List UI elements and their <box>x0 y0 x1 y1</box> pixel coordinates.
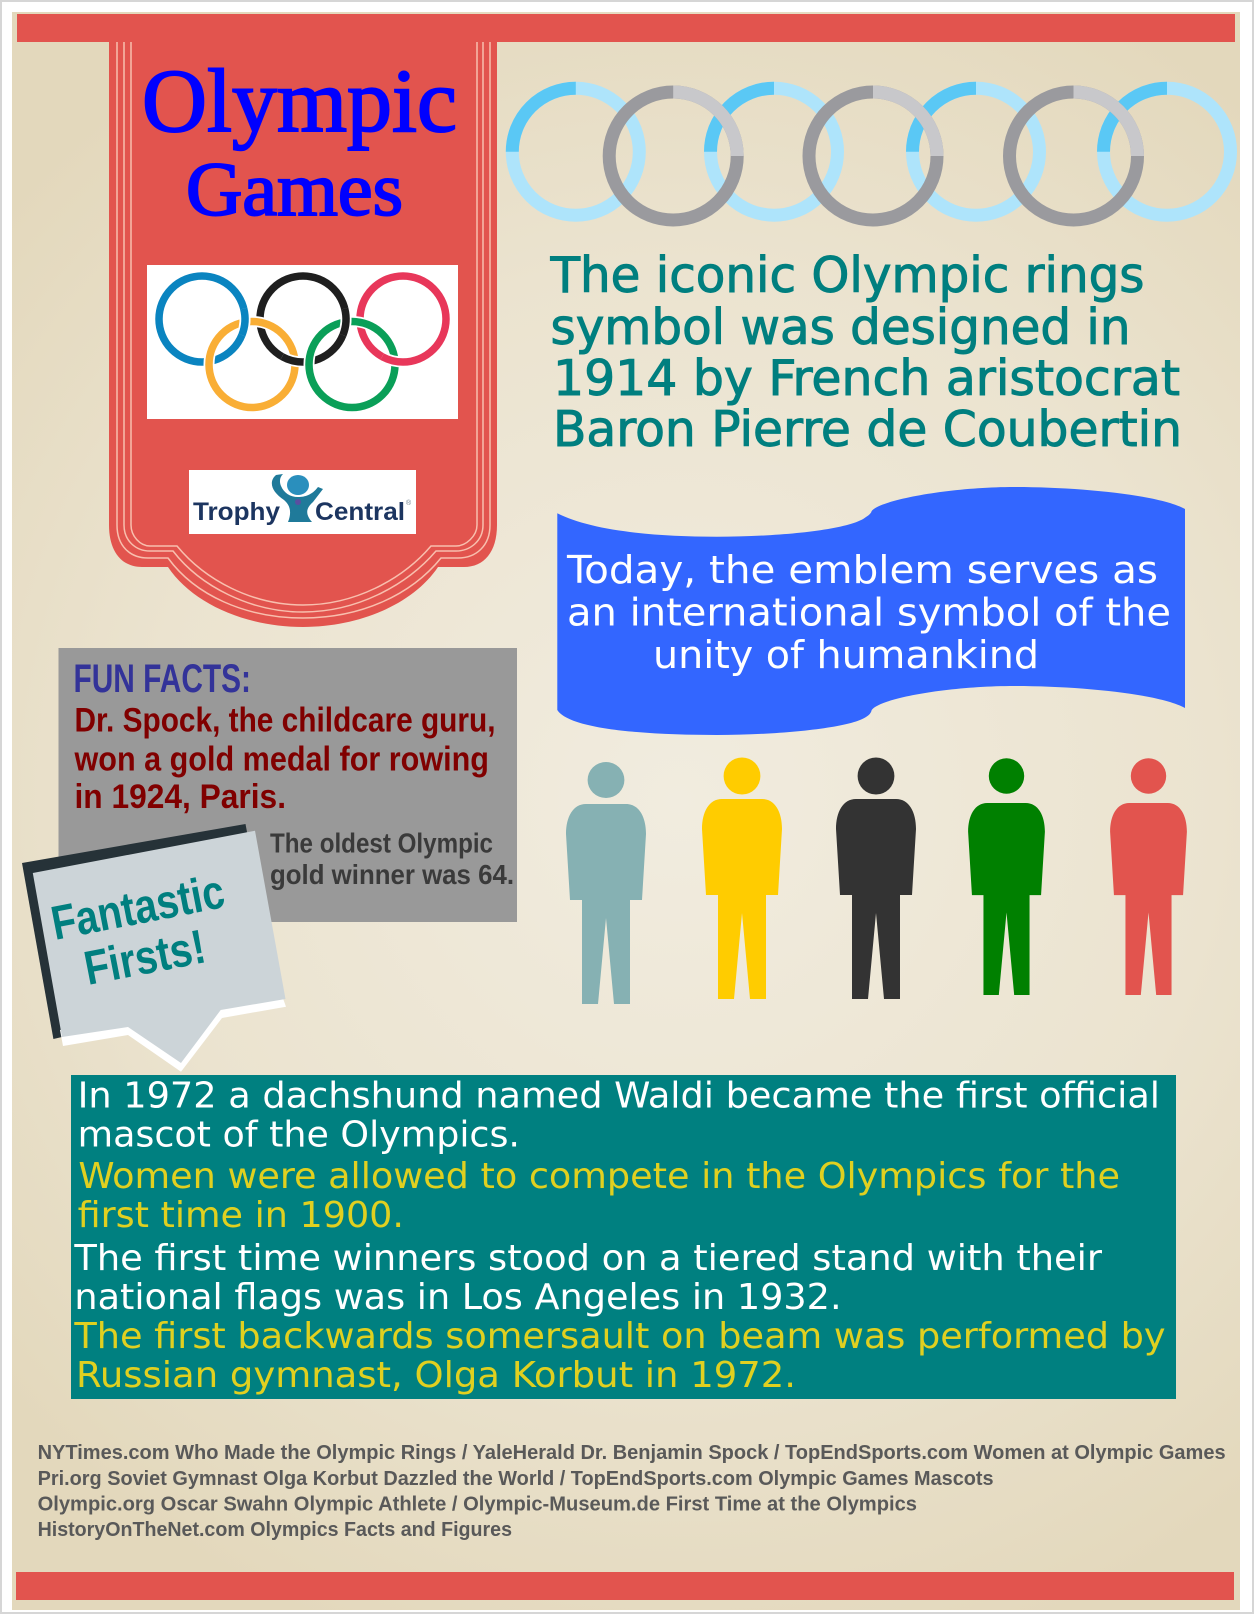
heading: fun facts: FUN FACTS: <box>74 657 251 701</box>
text: Waldi mascot: In 1972 a dachshund named Waldi became the first official <box>78 1076 1160 1117</box>
icon: person black <box>836 758 916 999</box>
top red bar <box>17 14 1235 42</box>
text block: rings history: 1914 by French aristocrat <box>553 350 1180 407</box>
icon: Olympic rings logo <box>147 265 458 419</box>
title: Olympic Games <box>142 52 457 232</box>
text: emblem statement: Today, the emblem serves as <box>566 548 1158 592</box>
text: Dr. Spock fact: in 1924, Paris. <box>74 778 286 816</box>
text: Waldi mascot <box>78 1076 1160 1156</box>
text: tiered stand <box>73 1238 1103 1318</box>
title: Olympic Games: Games <box>186 148 403 232</box>
text block: sources: Pri.org Soviet Gymnast Olga Korbut Dazzled the World / TopEndSports.com Olympic Games Mascots <box>38 1468 994 1490</box>
text: oldest winner fact <box>270 828 514 890</box>
title: Olympic Games: Olympic <box>142 52 457 151</box>
text: Dr. Spock fact <box>74 702 496 816</box>
text: backwards somersault: Russian gymnast, Olga Korbut in 1972. <box>76 1355 796 1396</box>
gray ring 3 <box>1010 92 1138 220</box>
text: women competing <box>78 1156 1120 1236</box>
bottom red bar <box>16 1572 1234 1600</box>
icon: person teal-gray <box>566 762 646 1004</box>
icon: person green <box>968 758 1045 995</box>
panel: title banner <box>109 42 497 627</box>
text block: sources: NYTimes.com Who Made the Olympic Rings / YaleHerald Dr. Benjamin Spock / TopEndSports.com Women at Olympic Games <box>38 1442 1226 1464</box>
text: Fantastic Firsts <box>47 865 229 996</box>
icon: person red <box>1110 758 1187 995</box>
text: backwards somersault <box>73 1316 1166 1396</box>
text: Fantastic Firsts: Firsts! <box>80 920 210 996</box>
logo: Trophy Central: Central <box>315 498 405 526</box>
gray ring 1 <box>609 92 737 220</box>
text: emblem statement: unity of humankind <box>653 633 1039 677</box>
panel: blue wavy flag <box>557 487 1185 735</box>
blue ring 1 <box>512 88 639 215</box>
text block: sources: HistoryOnTheNet.com Olympics Facts and Figures <box>38 1519 512 1541</box>
text: oldest winner fact: The oldest Olympic <box>270 828 493 859</box>
blue ring 4 <box>1104 88 1230 215</box>
text block: rings history <box>549 247 1182 458</box>
decorative rings row <box>512 88 1230 220</box>
logo: Trophy Central: ® <box>406 499 412 507</box>
people icons row <box>566 758 1187 1004</box>
logo: Trophy Central <box>189 470 416 534</box>
text block: sources: Olympic.org Oscar Swahn Olympic Athlete / Olympic-Museum.de First Time at the Olympics <box>38 1494 917 1516</box>
text: emblem statement <box>566 548 1171 677</box>
text: tiered stand: national flags was in Los Angeles in 1932. <box>74 1277 842 1318</box>
blue ring 2 <box>710 88 838 215</box>
blue ring 3 <box>912 88 1040 215</box>
text: emblem statement: an international symbol of the <box>567 590 1171 634</box>
text: Dr. Spock fact: Dr. Spock, the childcare guru, <box>74 702 496 740</box>
text block: sources <box>38 1442 1226 1541</box>
panel: fun facts <box>58 648 517 922</box>
text block: rings history: The iconic Olympic rings <box>549 247 1144 304</box>
text block: rings history: symbol was designed in <box>550 299 1130 356</box>
text: Waldi mascot: mascot of the Olympics. <box>78 1115 520 1156</box>
text: Dr. Spock fact: won a gold medal for rowing <box>74 741 489 779</box>
text: Fantastic Firsts: Fantastic <box>47 865 229 951</box>
text block: rings history: Baron Pierre de Coubertin <box>553 401 1182 458</box>
text: women competing: Women were allowed to compete in the Olympics for the <box>78 1156 1120 1197</box>
text: women competing: first time in 1900. <box>78 1195 404 1236</box>
text: tiered stand: The first time winners stood on a tiered stand with their <box>73 1238 1103 1279</box>
gray ring 2 <box>809 92 937 220</box>
logo: Trophy Central: Trophy <box>193 498 280 526</box>
panel: teal firsts facts <box>71 1075 1176 1399</box>
icon: person yellow <box>702 758 782 999</box>
text: oldest winner fact: gold winner was 64. <box>270 859 514 890</box>
text: backwards somersault: The first backwards somersault on beam was performed by <box>73 1316 1166 1357</box>
callout: Fantastic Firsts speech bubble <box>22 824 286 1072</box>
